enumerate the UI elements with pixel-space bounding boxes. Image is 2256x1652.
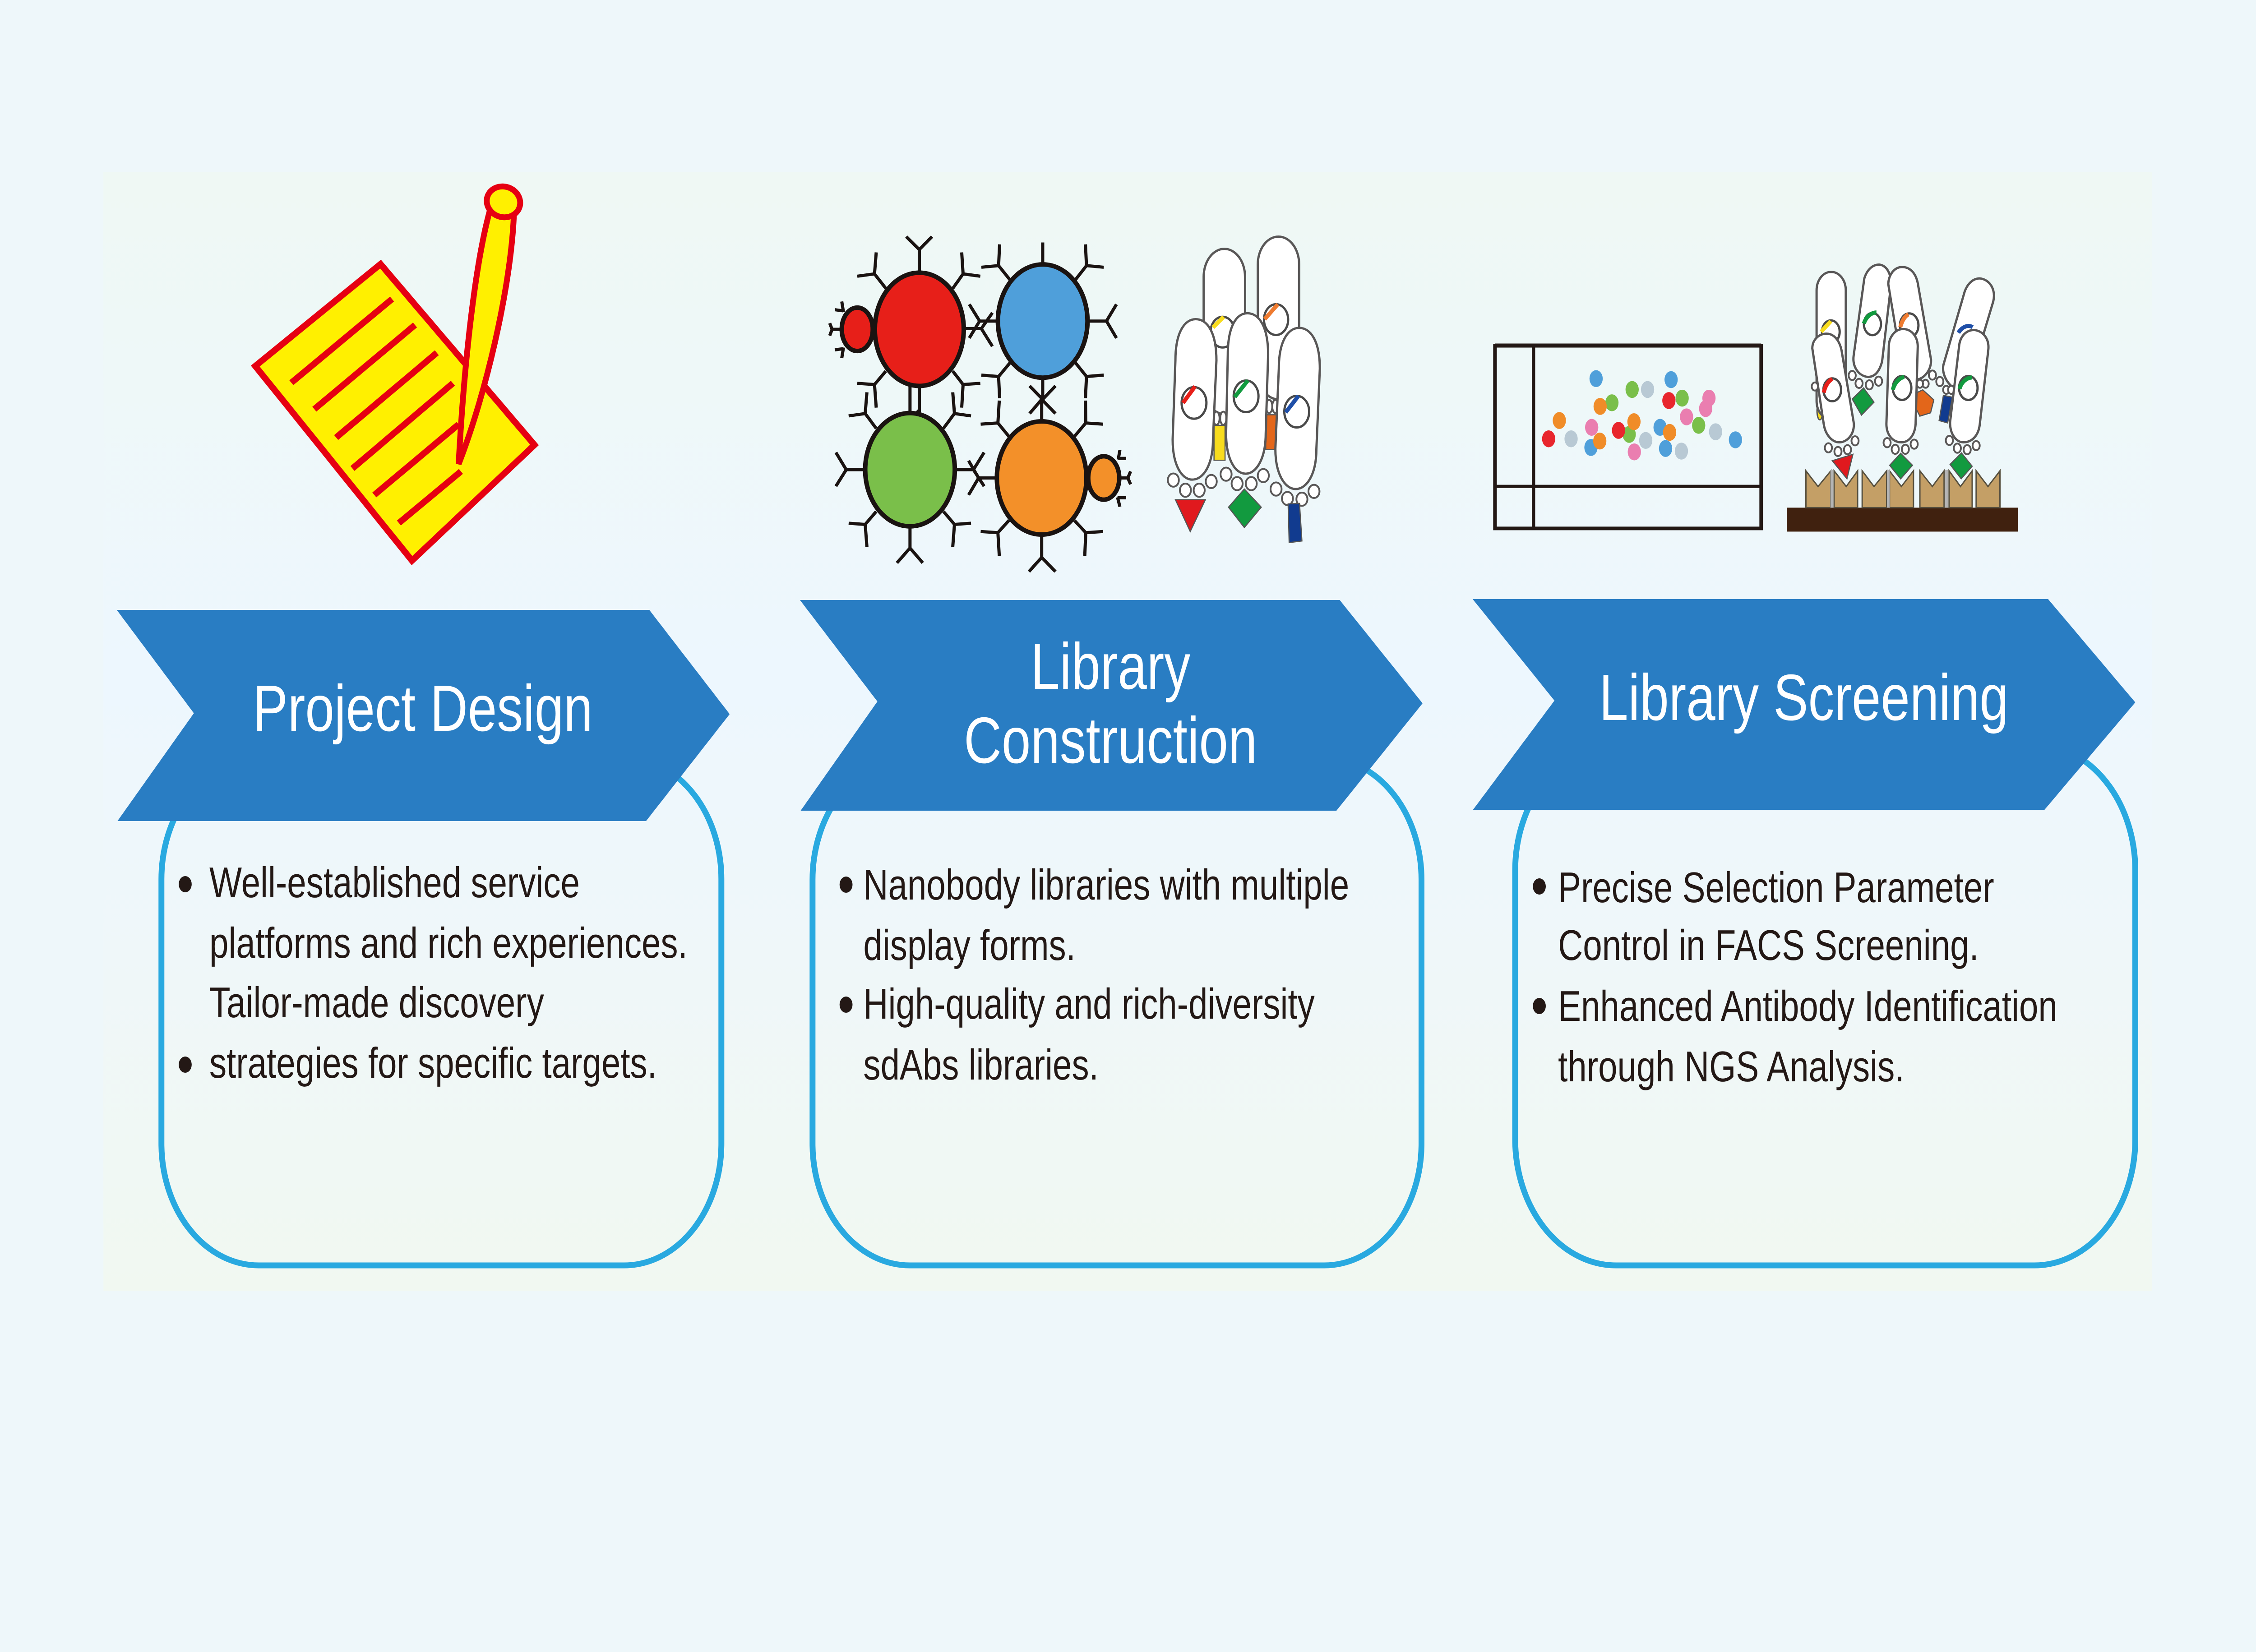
bullet list [840, 861, 1349, 1089]
inner gradient panel [103, 172, 2152, 1291]
content box [1515, 744, 2135, 1265]
bullet list: Control in FACS Screening. [1558, 922, 1979, 969]
icon: cells binding antigen plate [1787, 265, 2018, 531]
bullet list [1533, 864, 2057, 1091]
heading arrow [800, 600, 1423, 811]
icon: antibody-coated beads [830, 236, 1131, 572]
heading: Library Screening [1599, 661, 2009, 734]
bullet list: Well-established service [209, 859, 580, 907]
bullet list [179, 859, 688, 1087]
bullet list: Enhanced Antibody Identification [1558, 983, 2057, 1030]
icon: FACS scatter plot [1495, 346, 1761, 528]
panel: Library Screening [1473, 265, 2135, 1265]
heading arrow [1473, 599, 2135, 810]
icon: paper and pen [255, 184, 535, 561]
content box [162, 757, 721, 1265]
bullet list: strategies for specific targets. [209, 1039, 657, 1087]
bullet list: sdAbs libraries. [863, 1041, 1099, 1089]
panel: Project Design [117, 184, 730, 1265]
bullet list: through NGS Analysis. [1558, 1043, 1904, 1091]
bullet list: platforms and rich experiences. [209, 919, 688, 967]
bullet list: Precise Selection Parameter [1558, 864, 1994, 912]
heading: Project Design [253, 672, 593, 745]
bullet list: High-quality and rich-diversity [863, 980, 1315, 1028]
content box [813, 758, 1421, 1265]
heading arrow [117, 610, 730, 821]
heading: Library [1031, 630, 1191, 703]
icon: yeast display cells [1168, 236, 1320, 543]
panel: Library Construction [800, 236, 1423, 1265]
heading line two: Construction [964, 704, 1257, 777]
bullet list: display forms. [863, 922, 1076, 969]
bullet list: Nanobody libraries with multiple [863, 861, 1349, 909]
bullet list: Tailor-made discovery [209, 979, 544, 1027]
